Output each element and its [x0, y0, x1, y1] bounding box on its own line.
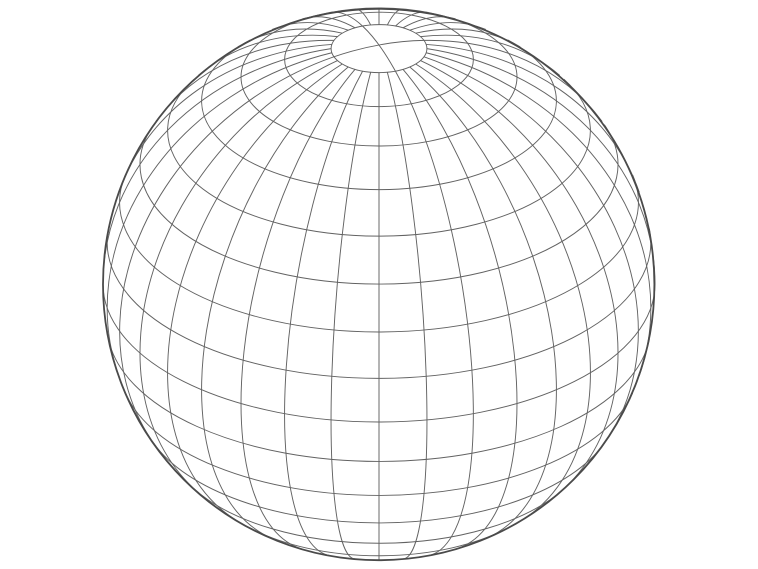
globe outline [103, 9, 654, 560]
parallels: latitude circles every 10 degrees [103, 8, 655, 556]
meridians: longitude lines every 10 degrees [103, 8, 655, 560]
